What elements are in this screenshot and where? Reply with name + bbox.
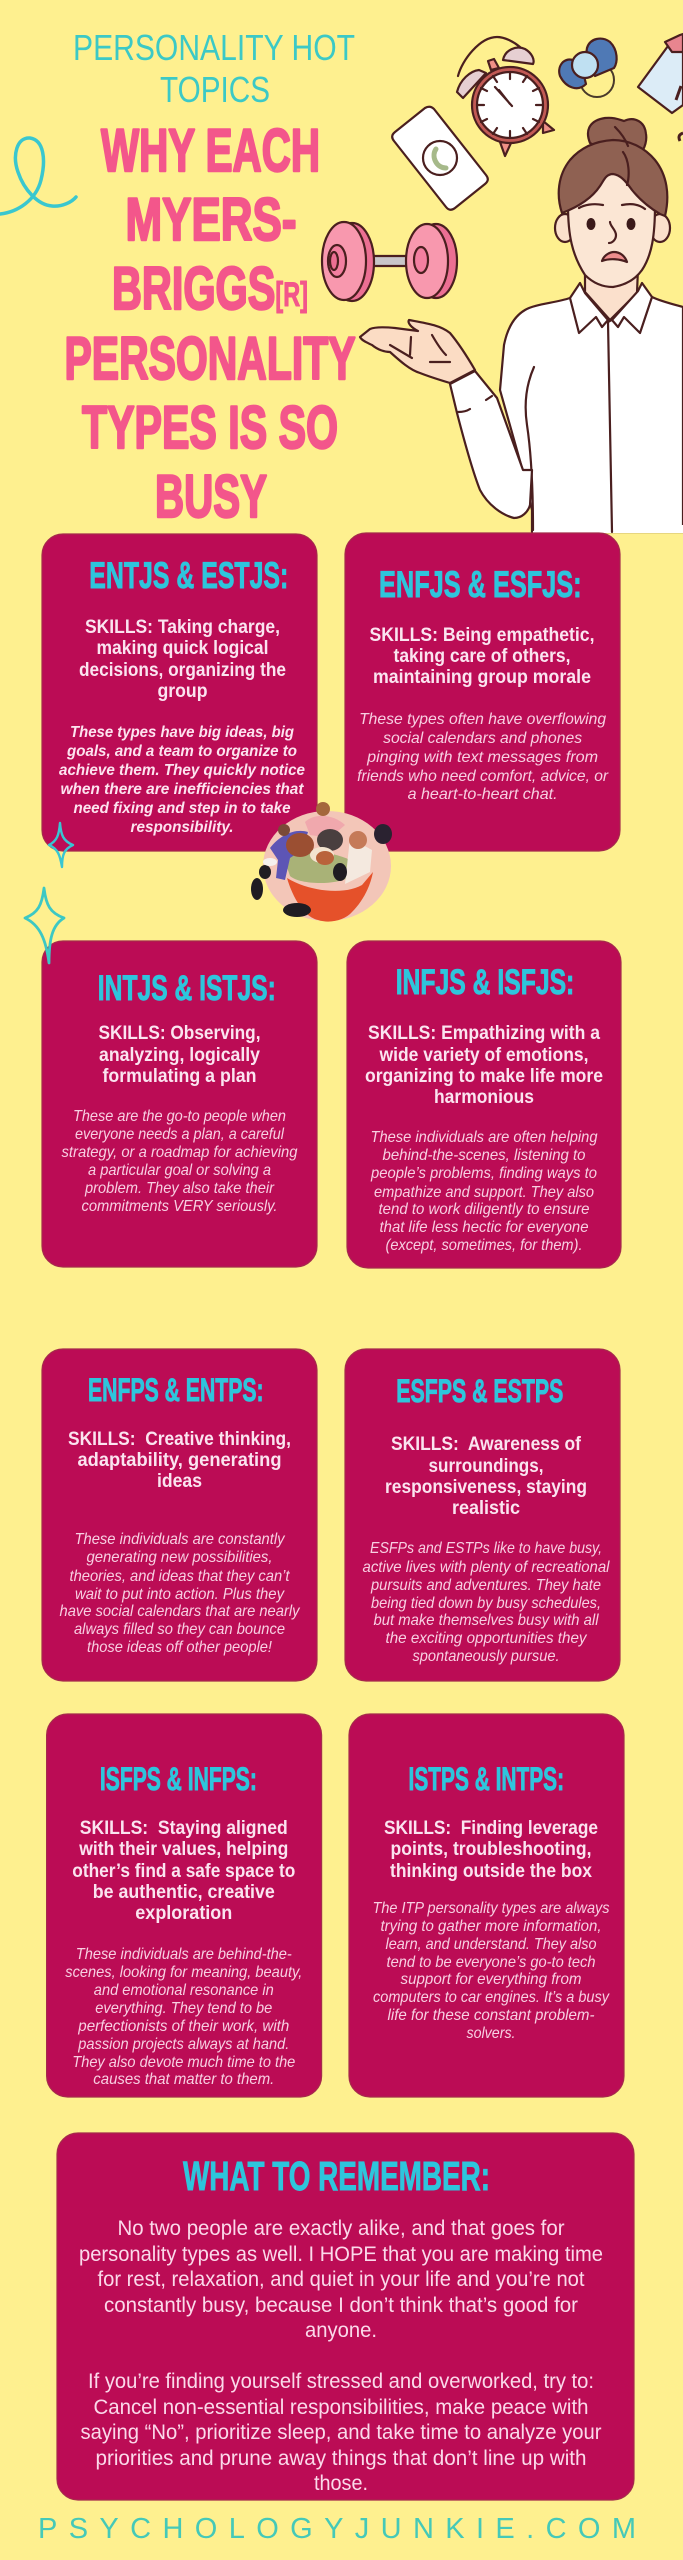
heading: ENTJS & ESTJS: — [89, 555, 288, 596]
paragraph one — [79, 2216, 603, 2342]
heading: ENFPS & ENTPS: — [88, 1372, 264, 1408]
description: everyone needs a plan, a careful — [75, 1126, 284, 1143]
description: goals, and a team to organize to — [66, 743, 297, 760]
skills: formulating a plan — [102, 1066, 256, 1087]
main title: [R] — [275, 276, 308, 314]
description: scenes, looking for meaning, beauty, — [65, 1964, 302, 1981]
skills: realistic — [452, 1498, 520, 1519]
skills: SKILLS: Finding leverage — [384, 1818, 598, 1839]
description: tend to be everyone’s go-to tech — [386, 1954, 596, 1971]
description: responsibility. — [130, 819, 234, 836]
paragraph two: saying “No”, prioritize sleep, and take time to analyze your — [80, 2420, 602, 2444]
description — [370, 1129, 598, 1254]
description: The ITP personality types are always — [372, 1900, 610, 1917]
skills: group — [158, 681, 208, 702]
description — [357, 711, 609, 803]
description: a particular goal or solving a — [88, 1162, 271, 1179]
card background — [345, 533, 620, 851]
description: achieve them. They quickly notice — [59, 762, 305, 779]
description: and emotional resonance in — [94, 1982, 274, 1999]
description: theories, and ideas that they can’t — [70, 1568, 290, 1585]
icon: phone — [392, 107, 488, 210]
hair — [559, 140, 667, 216]
icon: pacifier — [559, 39, 617, 97]
description: life for these constant problem- — [388, 2007, 594, 2024]
description: those ideas off other people! — [87, 1639, 273, 1656]
card background — [57, 2133, 634, 2500]
description: problem. They also take their — [84, 1180, 275, 1197]
skills: adaptability, generating — [78, 1450, 282, 1471]
description: ESFPs and ESTPs like to have busy, — [370, 1540, 602, 1557]
description: These are the go-to people when — [73, 1108, 286, 1125]
mouth — [602, 252, 627, 262]
skills: making quick logical — [96, 638, 268, 659]
description: passion projects always at hand. — [77, 2036, 289, 2053]
paragraph two: those. — [314, 2471, 368, 2495]
skills: thinking outside the box — [390, 1861, 592, 1882]
panel: ISFPs and INFPs — [47, 1714, 322, 2097]
icon: baby bottle — [638, 34, 683, 141]
description: spontaneously pursue. — [412, 1648, 560, 1665]
subtitle: personality hot topics: TOPICS — [160, 69, 270, 110]
description: strategy, or a roadmap for achieving — [62, 1144, 298, 1161]
heading: ENFJS & ESFJS: — [379, 564, 582, 605]
neck — [585, 268, 638, 320]
nose — [609, 222, 616, 243]
description: These individuals are often helping — [370, 1129, 598, 1146]
card background — [349, 1714, 624, 2097]
panel: ISTPs and INTPs — [349, 1714, 624, 2097]
paragraph one: constantly busy, because I don’t think that’s good for — [104, 2293, 578, 2317]
skills — [72, 1818, 295, 1924]
description: support for everything from — [400, 1971, 582, 1988]
description: pursuits and adventures. They hate — [370, 1577, 601, 1594]
description: These types have big ideas, big — [70, 724, 294, 741]
skills: with their values, helping — [78, 1839, 288, 1860]
description: learn, and understand. They also — [386, 1936, 597, 1953]
description — [372, 1900, 610, 2042]
description: always filled so they can bounce — [74, 1621, 285, 1638]
description — [60, 1531, 300, 1656]
panel: INTJs and ISTJs — [42, 941, 317, 1267]
panel: ENFJs and ESFJs — [345, 533, 620, 851]
skills: ideas — [157, 1471, 202, 1492]
hair bun — [588, 118, 646, 150]
description: friends who need comfort, advice, or — [357, 768, 609, 785]
description: These individuals are behind-the- — [76, 1946, 292, 1963]
skills: responsiveness, staying — [385, 1477, 587, 1498]
collar — [570, 283, 608, 333]
description: computers to car engines. It’s a busy — [373, 1989, 610, 2006]
skills: SKILLS: Being empathetic, — [370, 625, 594, 646]
skills — [385, 1434, 587, 1519]
icon: alarm clock — [457, 37, 554, 156]
description — [62, 1108, 298, 1215]
paragraph one: anyone. — [305, 2318, 377, 2342]
face — [568, 165, 655, 287]
description: (except, sometimes, for them). — [386, 1237, 582, 1254]
description: everything. They tend to be — [95, 2000, 272, 2017]
decorative teal swirl — [0, 138, 76, 214]
card background — [42, 534, 317, 851]
main title: PERSONALITY — [64, 325, 356, 392]
skills: other’s find a safe space to — [72, 1861, 295, 1882]
description: causes that matter to them. — [93, 2071, 274, 2088]
description: trying to gather more information, — [380, 1918, 602, 1935]
shirt body — [500, 297, 683, 532]
main title — [64, 117, 356, 530]
main title: BUSY — [155, 463, 267, 530]
description: wait to put into action. Plus they — [75, 1586, 285, 1603]
heading: WHAT TO REMEMBER: — [183, 2153, 490, 2199]
skills — [79, 617, 286, 702]
main title: TYPES IS SO — [82, 394, 338, 461]
heading: INTJS & ISTJS: — [98, 969, 276, 1008]
skills: SKILLS: Staying aligned — [80, 1818, 288, 1839]
brows and eyes — [579, 204, 645, 209]
description: the exciting opportunities they — [386, 1630, 587, 1647]
description: These types often have overflowing — [359, 711, 606, 728]
paragraph one: No two people are exactly alike, and that goes for — [118, 2216, 564, 2240]
skills: wide variety of emotions, — [379, 1045, 588, 1066]
panel: what to remember — [57, 2133, 634, 2500]
skills: decisions, organizing the — [79, 660, 286, 681]
heading: ISTPS & INTPS: — [409, 1761, 564, 1797]
woman illustration — [360, 118, 683, 533]
heading: ISFPS & INFPS: — [100, 1761, 257, 1797]
card background — [347, 941, 621, 1268]
icon: small sparkle — [49, 823, 73, 867]
skills: taking care of others, — [394, 646, 570, 667]
description: have social calendars that are nearly — [60, 1603, 300, 1620]
paragraph two — [80, 2369, 602, 2495]
description: being tied down by busy schedules, — [371, 1595, 601, 1612]
paragraph two: If you’re finding yourself stressed and overworked, try to: — [88, 2369, 594, 2393]
card background — [42, 1349, 317, 1681]
ears — [555, 214, 575, 242]
skills — [370, 625, 594, 688]
description: generating new possibilities, — [86, 1549, 272, 1566]
skills: SKILLS: Creative thinking, — [68, 1429, 291, 1450]
skills: organizing to make life more — [365, 1066, 603, 1087]
panel: INFJs and ISFJs — [347, 941, 621, 1268]
main title: BRIGGS — [112, 255, 349, 322]
icon: dumbbell — [322, 222, 457, 301]
arm and sleeve — [450, 371, 532, 518]
description: active lives with plenty of recreational — [362, 1559, 610, 1576]
description: empathize and support. They also — [374, 1184, 594, 1201]
hand — [360, 320, 475, 383]
heading: INFJS & ISFJS: — [396, 963, 574, 1002]
description: social calendars and phones — [383, 730, 582, 747]
title block — [64, 27, 356, 530]
skills: SKILLS: Taking charge, — [85, 617, 280, 638]
skills: SKILLS: Empathizing with a — [368, 1023, 600, 1044]
skills: maintaining group morale — [373, 667, 591, 688]
skills — [384, 1818, 598, 1882]
illustration: group of people in a circle — [251, 802, 392, 922]
description: They also devote much time to the — [72, 2054, 295, 2071]
heading: ESFPS & ESTPS — [396, 1373, 563, 1409]
description: solvers. — [466, 2025, 516, 2042]
description: commitments VERY seriously. — [82, 1198, 278, 1215]
description: tend to work diligently to ensure — [378, 1201, 590, 1218]
description: need fixing and step in to take — [74, 800, 291, 817]
main title: WHY EACH — [101, 117, 320, 184]
icon: large sparkle — [25, 888, 64, 963]
description: These individuals are constantly — [74, 1531, 285, 1548]
description: but make themselves busy with all — [374, 1612, 599, 1629]
description: when there are inefficiencies that — [60, 781, 304, 798]
panel: ENTJs and ESTJs — [42, 534, 317, 851]
description: people’s problems, finding ways to — [370, 1165, 597, 1182]
card background — [42, 941, 317, 1267]
card background — [47, 1714, 322, 2097]
skills: exploration — [135, 1903, 232, 1924]
subtitle: personality hot topics — [73, 27, 355, 110]
panel: ENFPs and ENTPs — [42, 1349, 317, 1681]
skills: harmonious — [434, 1087, 534, 1108]
description: behind-the-scenes, listening to — [382, 1147, 586, 1164]
description: that life less hectic for everyone — [380, 1219, 589, 1236]
skills: points, troubleshooting, — [390, 1839, 592, 1860]
skills: SKILLS: Awareness of — [391, 1434, 582, 1455]
skills — [68, 1429, 291, 1492]
subtitle: personality hot topics: PERSONALITY HOT — [73, 27, 355, 68]
description — [65, 1946, 302, 2088]
description: pinging with text messages from — [366, 749, 598, 766]
panel: ESFPs and ESTPs — [345, 1349, 620, 1681]
paragraph one: personality types as well. I HOPE that you are making time — [79, 2242, 603, 2266]
skills: analyzing, logically — [99, 1045, 260, 1066]
skills: be authentic, creative — [93, 1882, 275, 1903]
main title: MYERS- — [126, 186, 296, 253]
paragraph two: priorities and prune away things that don’t line up with — [96, 2446, 586, 2470]
description: a heart-to-heart chat. — [408, 786, 558, 803]
description: perfectionists of their work, with — [77, 2018, 289, 2035]
card background — [345, 1349, 620, 1681]
skills: SKILLS: Observing, — [98, 1023, 260, 1044]
footer website: PSYCHOLOGYJUNKIE.COM — [38, 2513, 636, 2545]
description — [362, 1540, 610, 1665]
skills — [365, 1023, 603, 1108]
skills — [98, 1023, 260, 1087]
skills: surroundings, — [428, 1456, 544, 1477]
paragraph two: Cancel non-essential responsibilities, make peace with — [94, 2395, 588, 2419]
description — [59, 724, 305, 836]
paragraph one: for rest, relaxation, and quiet in your life and you’re not — [98, 2267, 585, 2291]
